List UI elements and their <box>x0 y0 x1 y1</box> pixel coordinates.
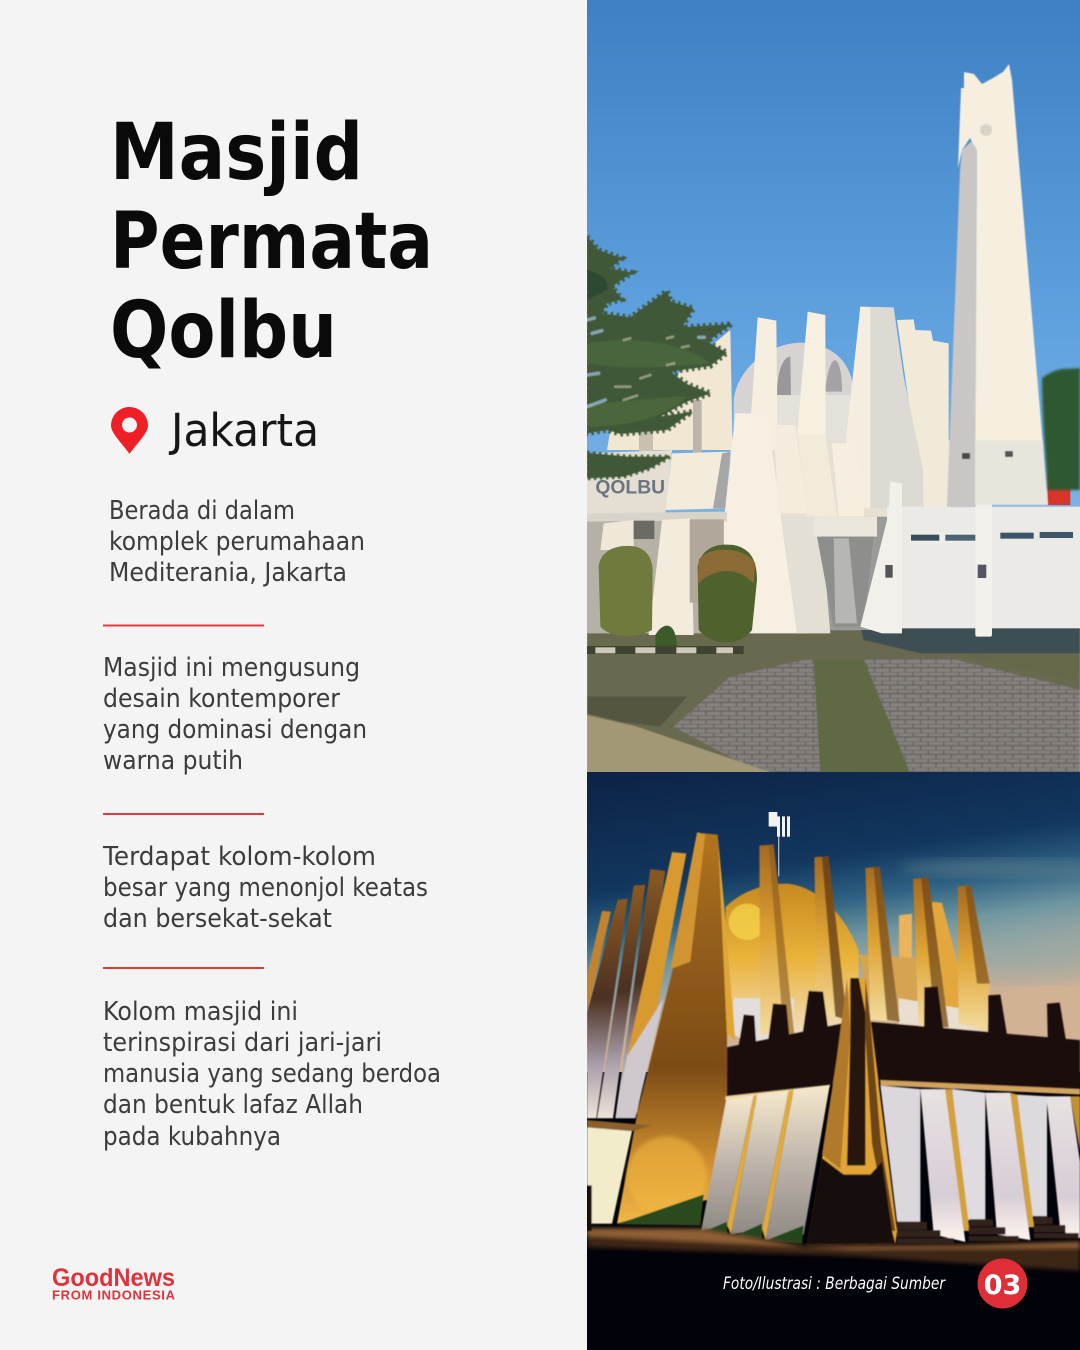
ground <box>587 627 1080 773</box>
icon: location pin <box>111 407 148 454</box>
signage: QOLBU <box>595 477 665 498</box>
text block 4: Kolom masjid ini <box>103 997 298 1027</box>
eaves <box>725 1085 830 1100</box>
title: Qolbu <box>110 286 337 376</box>
title <box>110 108 433 376</box>
lower facade <box>587 512 727 523</box>
text block 2 <box>103 653 367 776</box>
dome <box>725 884 859 1035</box>
cream wall behind tree <box>607 330 733 450</box>
text block 1 <box>109 496 365 588</box>
location row <box>111 404 319 457</box>
text block 2: Masjid ini mengusung <box>103 653 360 683</box>
text block 2: desain kontemporer <box>103 684 340 714</box>
minaret <box>947 64 1048 507</box>
fins <box>897 319 949 507</box>
big pyramid fin <box>617 833 727 1224</box>
dark roof band <box>727 1022 1080 1096</box>
building back: dome <box>734 342 852 430</box>
page number badge: 03 <box>984 1270 1021 1301</box>
logo: GoodNews from Indonesia: FROM INDONESIA <box>52 1288 176 1302</box>
text block 4: dan bentuk lafaz Allah <box>103 1090 363 1120</box>
photo: mosque illuminated at night <box>587 772 1080 1350</box>
text block 4 <box>103 997 441 1152</box>
slanted panels <box>701 1096 754 1231</box>
text block 3: Terdapat kolom-kolom <box>102 842 376 872</box>
back fins <box>899 914 912 958</box>
steps <box>897 1217 1079 1243</box>
tree right <box>1042 368 1080 490</box>
right wing wall <box>887 507 1080 628</box>
logo: GoodNews from Indonesia <box>52 1264 176 1302</box>
text block 3 <box>102 842 428 934</box>
text block 3: besar yang menonjol keatas <box>103 873 428 903</box>
title: Masjid <box>110 108 363 198</box>
left fin fan <box>587 911 611 1013</box>
lit ground <box>587 1231 1080 1271</box>
text block 4: terinspirasi dari jari-jari <box>103 1028 382 1058</box>
logo: GoodNews from Indonesia: GoodNews <box>52 1264 175 1292</box>
text block 2: warna putih <box>103 746 243 776</box>
title: Permata <box>110 197 433 287</box>
text block 2: yang dominasi dengan <box>103 715 367 745</box>
left lit canopy <box>587 1120 652 1131</box>
text block 3: dan bersekat-sekat <box>103 904 332 934</box>
text block 4: pada kubahnya <box>103 1122 281 1152</box>
hedges <box>599 546 653 636</box>
photo credit: Foto/Ilustrasi : Berbagai Sumber <box>723 1274 946 1293</box>
text block 4: manusia yang sedang berdoa <box>103 1059 441 1089</box>
backing wall <box>730 440 950 520</box>
central pyramid <box>807 978 897 1245</box>
text block 1: Berada di dalam <box>109 496 295 526</box>
Allah sign <box>769 812 790 876</box>
page number badge <box>978 1258 1028 1308</box>
tree left <box>587 237 732 478</box>
photo: white mosque by day <box>587 0 1080 773</box>
location name: Jakarta <box>168 404 319 457</box>
white bays and columns <box>880 1085 920 1222</box>
text block 1: komplek perumahaan <box>109 527 365 557</box>
text block 1: Mediterania, Jakarta <box>109 558 347 588</box>
